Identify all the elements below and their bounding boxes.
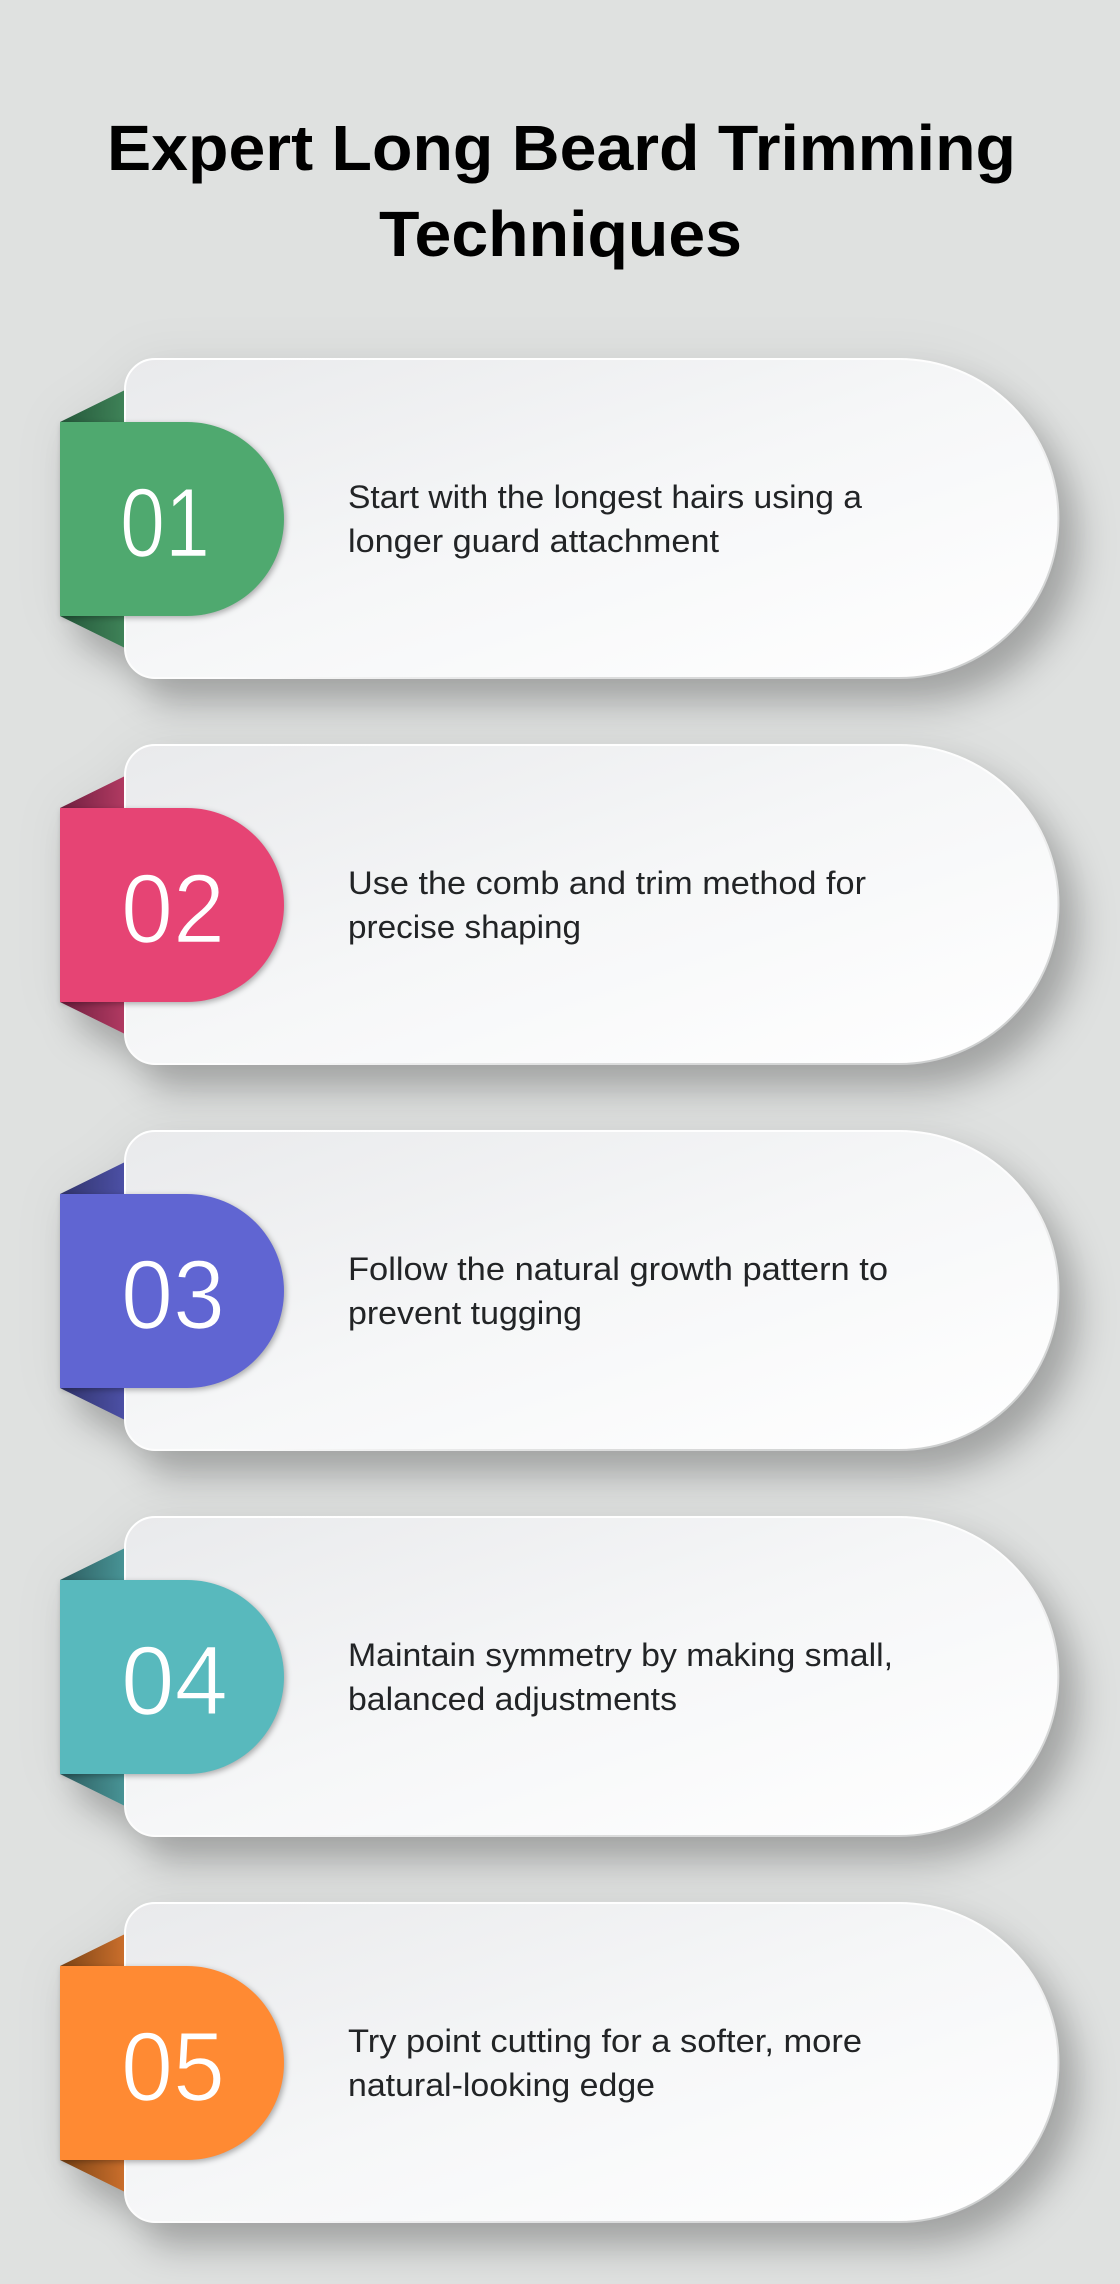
text 01: longer guard attachment — [348, 523, 719, 559]
title — [107, 112, 1016, 270]
text 02: precise shaping — [348, 909, 581, 945]
text 03: prevent tugging — [348, 1295, 582, 1331]
card 02 — [60, 745, 1058, 1064]
number tab 01 — [60, 422, 284, 616]
number tab 02 — [60, 808, 284, 1002]
number tab 04 — [60, 1580, 284, 1774]
card 05 — [60, 1903, 1058, 2222]
text 03: Follow the natural growth pattern to — [348, 1251, 888, 1287]
number tab 01: 01 — [120, 468, 210, 578]
panel: step 02 — [60, 745, 1058, 1064]
text 05 — [348, 2023, 862, 2103]
number tab 03 — [60, 1194, 284, 1388]
text 05: natural-looking edge — [348, 2067, 655, 2103]
title: Expert Long Beard Trimming — [107, 112, 1016, 184]
panel: step 05 — [60, 1903, 1058, 2222]
panel: step 03 — [60, 1131, 1058, 1450]
panel: step 04 — [60, 1517, 1058, 1836]
text 04 — [348, 1637, 893, 1717]
text 02: Use the comb and trim method for — [348, 865, 866, 901]
panel: step 01 — [60, 359, 1058, 678]
number tab 05 — [60, 1966, 284, 2160]
text 05: Try point cutting for a softer, more — [348, 2023, 862, 2059]
text 01: Start with the longest hairs using a — [348, 479, 863, 515]
number tab 05: 05 — [121, 2012, 225, 2122]
card 04 — [60, 1517, 1058, 1836]
number tab 04: 04 — [121, 1626, 228, 1736]
title: Techniques — [379, 198, 742, 270]
card 01 — [60, 359, 1058, 678]
text 04: Maintain symmetry by making small, — [348, 1637, 893, 1673]
number tab 02: 02 — [121, 854, 225, 964]
card 03 — [60, 1131, 1058, 1450]
text 04: balanced adjustments — [348, 1681, 677, 1717]
number tab 03: 03 — [121, 1240, 225, 1350]
text 02 — [348, 865, 866, 945]
text 01 — [348, 479, 863, 559]
text 03 — [348, 1251, 888, 1331]
